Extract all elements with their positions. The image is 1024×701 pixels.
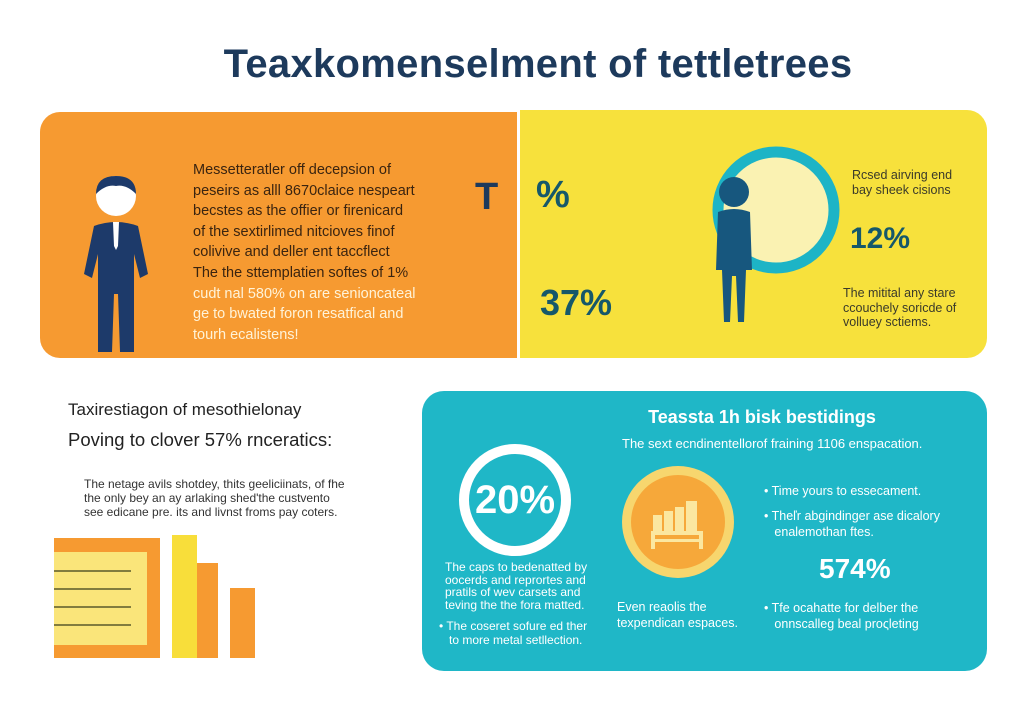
text block: oocerds and reprortes and bbox=[445, 573, 586, 587]
text block bbox=[617, 600, 738, 630]
text block: The caps to bedenatted by bbox=[445, 560, 587, 574]
text block: peseirs as alll 8670claice nespeart bbox=[193, 183, 415, 199]
subtitle: The sext ecndinentellorof fraining 1106 enspacation. bbox=[622, 436, 922, 451]
text block: texpendican espaces. bbox=[617, 616, 738, 630]
panel heading: Teassta 1h bisk bestidings bbox=[648, 407, 876, 427]
callout text: bay sheek cisions bbox=[852, 183, 951, 197]
paragraph: the only bey an ay arlaking shed'the custvento bbox=[84, 491, 330, 505]
text block: cudt nal 580% on are senioncateal bbox=[193, 286, 416, 302]
text block: Even reaolis the bbox=[617, 600, 707, 614]
bullets: • Time yours to essecament. bbox=[764, 484, 921, 498]
text block: becstes as the offier or firenicard bbox=[193, 203, 403, 219]
chart: ring with person bbox=[712, 146, 840, 322]
panel: orange bbox=[40, 112, 517, 358]
bullet bbox=[764, 601, 919, 631]
stat: percent: % bbox=[536, 174, 570, 216]
text block: The the sttemplatien softes of 1% bbox=[193, 265, 408, 281]
icon: person bbox=[84, 176, 148, 352]
panel: yellow bbox=[520, 110, 987, 358]
text block bbox=[193, 162, 416, 343]
text block: colivive and deller ent taccflect bbox=[193, 244, 390, 260]
text block: teving the the fora matted. bbox=[445, 598, 584, 612]
bullet: • The coseret sofure ed ther bbox=[439, 619, 587, 633]
bullet: • Tfe ocahatte for delber the bbox=[764, 601, 918, 615]
text block: tourh ecalistens! bbox=[193, 327, 299, 343]
stat: T: T bbox=[475, 176, 498, 218]
stat ring: 20% bbox=[459, 444, 571, 556]
text block: volluey sctiems. bbox=[843, 315, 931, 329]
paragraph: see edicane pre. its and livnst froms pay coters. bbox=[84, 505, 337, 519]
bullet bbox=[439, 619, 587, 646]
text block: pratils of wev carsets and bbox=[445, 585, 580, 599]
text block: of the sextirlimed nitcioves finof bbox=[193, 224, 394, 240]
bullets bbox=[764, 484, 940, 539]
text block: ge to bwated foron resatfical and bbox=[193, 306, 403, 322]
title: Teaxkomenselment of tettletrees bbox=[224, 42, 852, 86]
bullets: enalemothan ftes. bbox=[774, 525, 874, 539]
bullet: onnscalleg beal proςleting bbox=[774, 617, 919, 631]
text block: The mitital any stare bbox=[843, 286, 956, 300]
chart: bars bbox=[54, 535, 255, 658]
heading: bottom left: Taxirestiagon of mesothielonay bbox=[68, 400, 301, 419]
text block: ccouchely soricde of bbox=[843, 300, 956, 314]
stat ring: 20%: 20% bbox=[475, 478, 555, 522]
paragraph: The netage avils shotdey, thits geeliciinats, of fhe bbox=[84, 477, 345, 491]
panel: teal bbox=[422, 391, 987, 671]
stat: 12%: 12% bbox=[850, 222, 910, 255]
paragraph bbox=[84, 477, 345, 519]
bullets: • Theľr abgindinger ase dicalory bbox=[764, 509, 940, 523]
text block bbox=[445, 560, 588, 612]
text block: Messetteratler off decepsion of bbox=[193, 162, 391, 178]
icon: chart coin bbox=[622, 466, 734, 578]
subheading: Poving to clover 57% rnceratics: bbox=[68, 429, 332, 450]
stat: 37%: 37% bbox=[540, 282, 612, 323]
callout text: Rcsed airving end bbox=[852, 168, 952, 182]
text block bbox=[843, 286, 956, 329]
stat: 574%: 574% bbox=[819, 553, 891, 584]
callout text bbox=[852, 168, 952, 197]
bullet: to more metal setllection. bbox=[449, 632, 582, 646]
